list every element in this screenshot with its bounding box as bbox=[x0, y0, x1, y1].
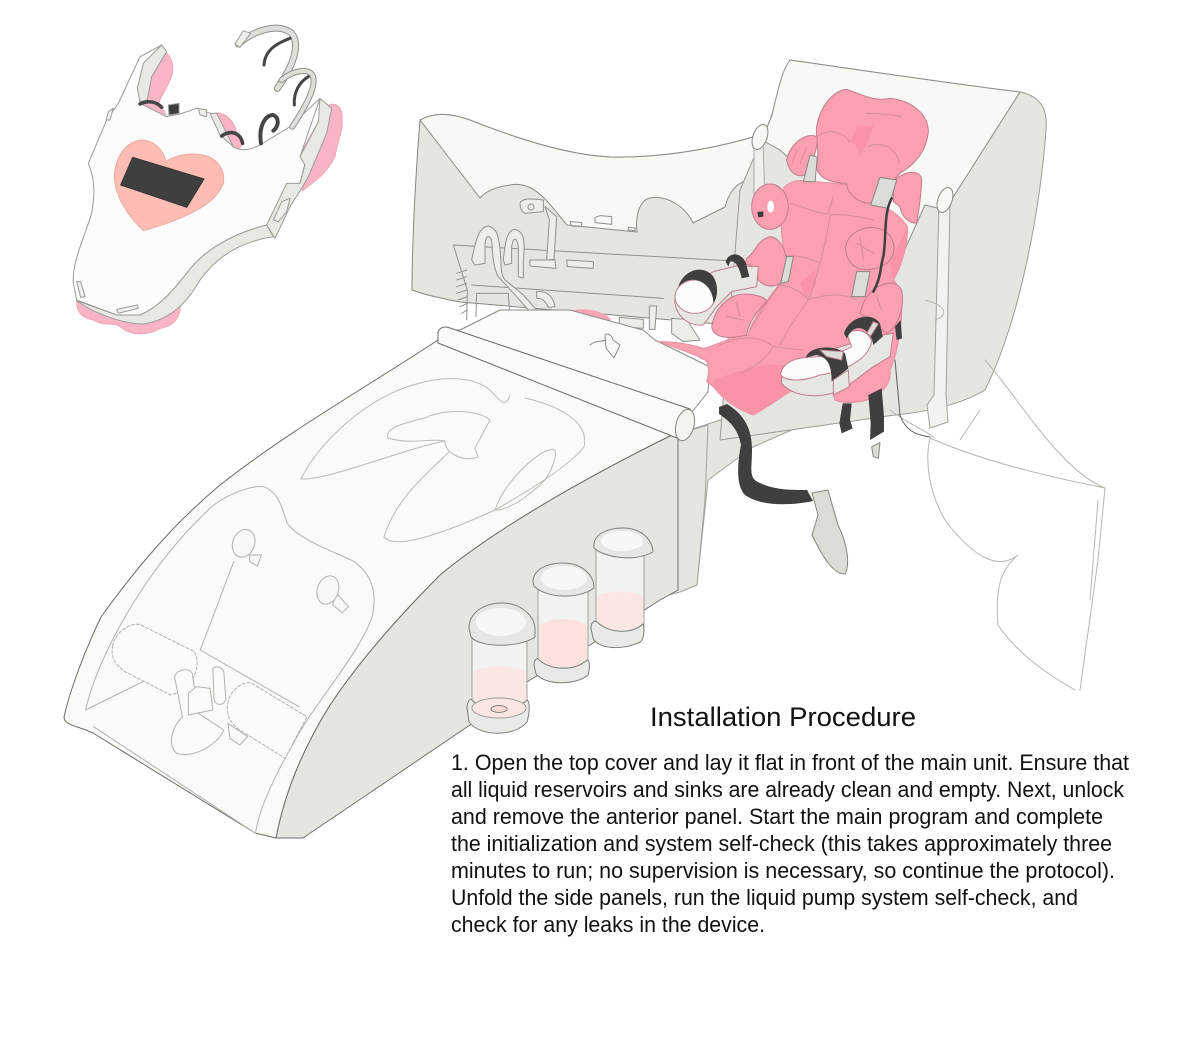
small connector block bbox=[168, 103, 179, 115]
heart bbox=[114, 140, 224, 231]
seat: metal clips bbox=[781, 155, 897, 297]
heading: Installation Procedure: Installation Procedure bbox=[650, 702, 916, 732]
text block: installation step 1: check for any leaks in the device. bbox=[451, 912, 765, 937]
seat: wire bbox=[873, 198, 892, 292]
housing: top white band bbox=[420, 114, 760, 232]
pink cushions behind the panel bbox=[77, 52, 342, 334]
reservoir 3 bbox=[591, 528, 653, 648]
bed: front recess bbox=[86, 486, 374, 833]
text block: installation step 1: Unfold the side panels, run the liquid pump system self-check, and bbox=[451, 885, 1078, 910]
text block: installation step 1: and remove the anterior panel. Start the main program and complete bbox=[451, 804, 1103, 829]
bed: cylinder side panel bbox=[640, 425, 708, 600]
text block: installation step 1: all liquid reservoirs and sinks are already clean and empty. Next, unlock bbox=[451, 777, 1125, 802]
text block: installation step 1: minutes to run; no supervision is necessary, so continue the protocol). bbox=[451, 858, 1115, 883]
black cover plate bbox=[121, 157, 204, 207]
seat: shaded side bbox=[713, 227, 907, 415]
seat: bolsters bbox=[787, 135, 817, 176]
text block: installation step 1: the initialization and system self-check (this takes approximately three bbox=[451, 831, 1112, 856]
seat: headrest bbox=[816, 89, 928, 203]
panel body bbox=[73, 45, 320, 315]
housing: left wing bbox=[412, 114, 790, 330]
housing: base bbox=[680, 360, 900, 590]
control slots bbox=[273, 198, 290, 222]
bed: cover top and roller bbox=[445, 310, 710, 412]
right armrest cuff bbox=[781, 317, 893, 396]
housing: upper white face bbox=[762, 60, 1020, 260]
seat: lower straps bbox=[839, 320, 902, 440]
text block: installation step 1 bbox=[451, 750, 1129, 937]
bed: upper moulded recess bbox=[301, 379, 585, 542]
reservoir 2 bbox=[533, 563, 594, 683]
bed: top surface bbox=[64, 340, 678, 838]
bristle rollers bbox=[112, 624, 197, 695]
housing: side strut bbox=[927, 205, 950, 428]
main unit housing bbox=[412, 60, 1046, 590]
reservoir 1 bbox=[467, 603, 535, 733]
left armrest cuff bbox=[675, 254, 758, 325]
top cover bed bbox=[64, 309, 710, 838]
seat: panel seams bbox=[717, 113, 902, 373]
panel: removed anterior panel with heart bbox=[73, 28, 342, 334]
long dark strap with foot clip bbox=[719, 404, 848, 574]
grey rim bbox=[77, 45, 332, 324]
housing: hinge post bbox=[754, 140, 765, 205]
housing: right body bbox=[720, 60, 1046, 440]
clip arcs bbox=[238, 28, 314, 127]
pink seat bbox=[660, 89, 928, 458]
bed: grey side face bbox=[276, 432, 678, 838]
foot clip bbox=[812, 490, 848, 574]
transparent side panel outlines bbox=[890, 300, 1105, 690]
mounts bbox=[171, 670, 224, 754]
cable with plug bbox=[895, 360, 930, 437]
bed: pink flap under cover bbox=[570, 309, 612, 325]
text block: installation step 1: 1. Open the top cover and lay it flat in front of the main unit. Ensure that bbox=[451, 750, 1129, 775]
console: pumps and tubes bbox=[453, 199, 727, 342]
connector bands and cables bbox=[140, 38, 308, 143]
bed: small clasp bbox=[590, 334, 620, 358]
liquid reservoirs bbox=[467, 528, 653, 733]
latches bbox=[77, 31, 251, 313]
seat: body bbox=[660, 180, 907, 415]
tube loops bbox=[472, 199, 700, 342]
